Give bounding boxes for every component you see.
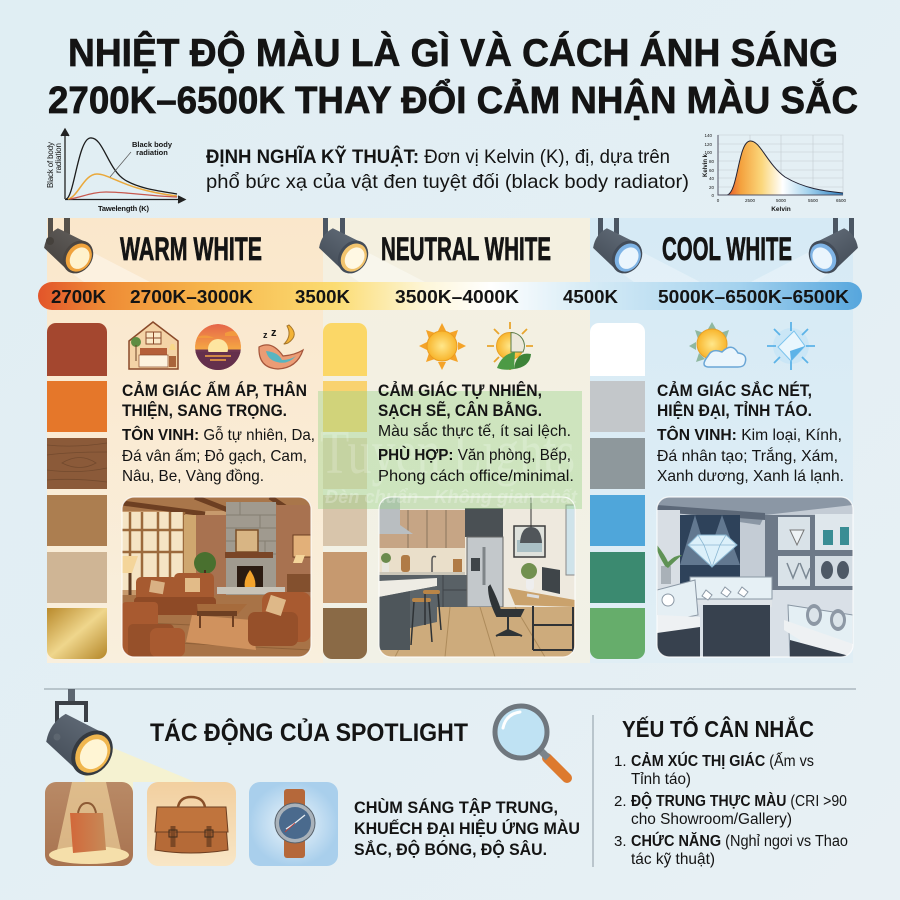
chart: Kelvin spectrum curve: 60	[709, 168, 714, 173]
illustration: jewellery showroom	[657, 497, 853, 657]
icon: sleep moon: z	[271, 327, 277, 339]
title	[48, 30, 858, 122]
chart: black body radiation curves: Black body	[132, 140, 173, 149]
Kelvin gradient scale bar	[38, 282, 862, 310]
heading: neutral white: NEUTRAL WHITE	[381, 231, 551, 267]
heading: cool white: COOL WHITE	[662, 231, 792, 267]
chart: black body radiation curves: Tawelength (K)	[98, 204, 150, 213]
list: considerations: cho Showroom/Gallery)	[631, 811, 792, 828]
Kelvin gradient scale bar: 3500K	[295, 286, 351, 307]
icon: sleep moon	[259, 325, 303, 369]
icon: magnifier	[495, 706, 567, 778]
icon: cool spotlight left	[587, 218, 649, 279]
watermark: Tuyến Lights	[320, 419, 575, 487]
chart: black body radiation curves: Black of body	[46, 142, 55, 188]
chart: Kelvin spectrum curve: 140	[704, 133, 712, 138]
heading: spotlight effect: TÁC ĐỘNG CỦA SPOTLIGHT	[150, 717, 468, 747]
text: cool description	[657, 381, 844, 485]
list: considerations: tác kỹ thuật)	[631, 851, 715, 868]
illustration: warm living room	[122, 497, 311, 657]
icon: crystal	[767, 322, 815, 370]
text: cool description: CẢM GIÁC SẮC NÉT,	[657, 381, 812, 400]
product tile: wristwatch	[249, 782, 338, 866]
text: spotlight effect description: SẮC, ĐỘ BÓNG, ĐỘ SÂU.	[354, 840, 547, 859]
title: NHIỆT ĐỘ MÀU LÀ GÌ VÀ CÁCH ÁNH SÁNG	[68, 30, 838, 75]
Kelvin gradient scale bar: 4500K	[563, 286, 619, 307]
watermark	[318, 391, 582, 509]
text: warm description	[122, 381, 315, 485]
panel: warm white background	[47, 218, 323, 663]
icon: warm spotlight	[38, 218, 100, 279]
text: spotlight effect description: CHÙM SÁNG TẬP TRUNG,	[354, 798, 558, 817]
text: cool description: Xanh dương, Xanh lá lạnh.	[657, 468, 844, 485]
list: considerations: 3.	[614, 833, 627, 850]
text: neutral description: SẠCH SẼ, CÂN BẰNG.	[378, 400, 542, 420]
list: considerations: 1.	[614, 753, 627, 770]
light beams from spotlights	[70, 252, 831, 282]
text: warm description: THIỆN, SANG TRỌNG.	[122, 401, 287, 420]
chart: black body radiation curves: radiation	[54, 143, 63, 173]
panel: cool white background	[590, 218, 853, 663]
image borders	[122, 497, 853, 657]
heading: considerations: YẾU TỐ CÂN NHẮC	[622, 715, 814, 742]
chart: Kelvin spectrum curve: 0	[711, 193, 714, 198]
chart: black body radiation curves	[46, 129, 185, 213]
product tile: leather bag	[147, 782, 236, 866]
text: warm description: TÔN VINH: Gỗ tự nhiên, Da,	[122, 425, 315, 444]
chart: Kelvin spectrum curve: 80	[709, 159, 714, 164]
list: considerations: 2.	[614, 793, 627, 810]
Kelvin gradient scale bar: 3500K–4000K	[395, 286, 520, 307]
definition text: ĐỊNH NGHĨA KỸ THUẬT: Đơn vị Kelvin (K), đị, dựa trên	[206, 144, 670, 168]
spotlight beam to products	[84, 745, 195, 815]
list: considerations: ĐỘ TRUNG THỰC MÀU (CRI >90	[631, 792, 847, 810]
chart: Kelvin spectrum curve: 100	[704, 150, 712, 155]
text: neutral description: Màu sắc thực tế, ít sai lệch.	[378, 421, 571, 440]
title: 2700K–6500K THAY ĐỔI CẢM NHẬN MÀU SẮC	[48, 77, 858, 122]
chart: Kelvin spectrum curve: Kelvin	[771, 206, 791, 213]
chart: Kelvin spectrum curve	[703, 133, 847, 213]
chart: Kelvin spectrum curve: 5000	[776, 198, 787, 203]
text: cool description: HIỆN ĐẠI, TỈNH TÁO.	[657, 401, 812, 420]
chart: Kelvin spectrum curve: 6500	[836, 198, 847, 203]
text: cool description: TÔN VINH: Kim loại, Kính,	[657, 425, 842, 444]
text: neutral description: CẢM GIÁC TỰ NHIÊN,	[378, 381, 542, 400]
icon: large spotlight	[39, 689, 121, 784]
icon: sunset	[195, 324, 243, 372]
product tile: shopping bag	[45, 782, 133, 866]
text: warm description: Nâu, Be, Vàng đồng.	[122, 468, 264, 485]
icon: neutral spotlight	[313, 218, 375, 279]
Kelvin gradient scale bar: 2700K–3000K	[130, 286, 254, 307]
cool colour swatches	[590, 323, 645, 659]
Kelvin gradient scale bar: 5000K–6500K–6500K	[658, 286, 850, 307]
chart: Kelvin spectrum curve: 5500	[808, 198, 819, 203]
chart: Kelvin spectrum curve: 2500	[745, 198, 756, 203]
illustration: kitchen and office	[379, 497, 575, 657]
text: warm description: CẢM GIÁC ẤM ÁP, THÂN	[122, 381, 307, 400]
icon: bedroom house	[129, 322, 178, 369]
chart: Kelvin spectrum curve: 40	[709, 176, 714, 181]
chart: Kelvin spectrum curve: 120	[704, 142, 712, 147]
text: cool description: Đá nhân tạo; Trắng, Xám,	[657, 446, 838, 465]
watermark: Đèn chuẩn - Không gian chất	[325, 487, 578, 507]
list: considerations	[614, 752, 848, 868]
icon: sleep moon: z	[263, 330, 268, 340]
text: neutral description: Phong cách office/minimal.	[378, 468, 574, 485]
text: spotlight effect description	[354, 798, 580, 859]
panel: neutral white background	[323, 218, 590, 663]
chart: Kelvin spectrum curve: 0	[717, 198, 720, 203]
heading: warm white: WARM WHITE	[120, 231, 262, 267]
icon: sun behind cloud	[689, 322, 746, 367]
neutral colour swatches	[323, 323, 367, 659]
definition text	[206, 144, 689, 193]
text: spotlight effect description: KHUẾCH ĐẠI HIỆU ỨNG MÀU	[354, 819, 580, 838]
divider lines	[44, 689, 856, 867]
chart: Kelvin spectrum curve: Kelvin k	[703, 153, 709, 177]
text: neutral description	[378, 381, 574, 485]
Kelvin gradient scale bar: 2700K	[51, 286, 107, 307]
text: neutral description: PHÙ HỢP: Văn phòng, Bếp,	[378, 445, 571, 464]
definition text: phổ bức xạ của vật đen tuyệt đối (black body radiator)	[206, 171, 689, 193]
warm colour swatches	[47, 323, 107, 659]
chart: black body radiation curves: radiation	[136, 148, 168, 157]
icon: cool spotlight right	[802, 218, 864, 279]
text: warm description: Đá vân ấm; Đỏ gạch, Cam,	[122, 448, 307, 465]
list: considerations: CẢM XÚC THỊ GIÁC (Ấm vs	[631, 752, 814, 770]
list: considerations: Tỉnh táo)	[631, 771, 691, 788]
icon: half sun with leaf	[487, 322, 533, 370]
icon: sun	[419, 323, 466, 370]
chart: Kelvin spectrum curve: 20	[709, 185, 714, 190]
list: considerations: CHỨC NĂNG (Nghỉ ngơi vs Thao	[631, 832, 848, 850]
